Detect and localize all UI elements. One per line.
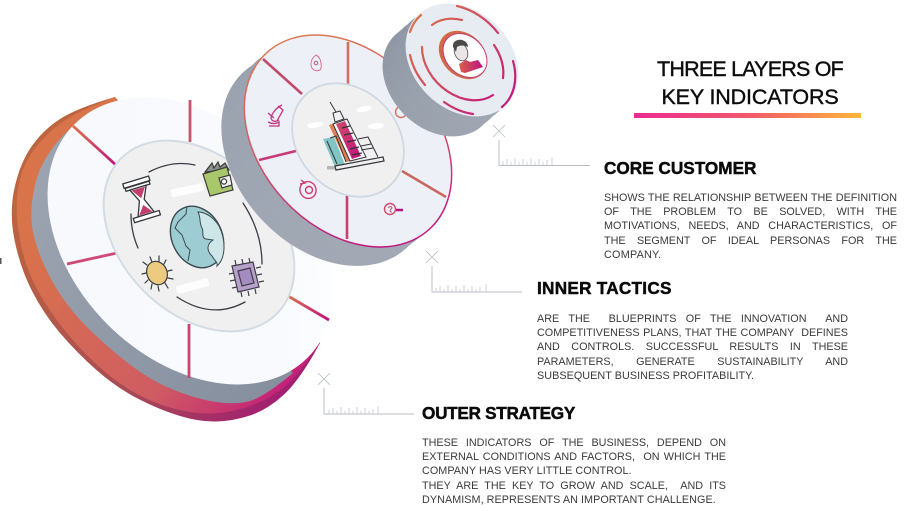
- top disc grey side: [360, 0, 533, 159]
- middle disc face: [203, 0, 493, 288]
- title underline: [634, 113, 861, 118]
- text: core customer description: COMPANY.: [604, 249, 661, 261]
- text: core customer description: OF THE PROBLEM TO BE SOLVED, WITH THE: [604, 206, 897, 218]
- icon: hourglass: [123, 176, 160, 223]
- icon: customer person: [452, 40, 483, 73]
- icon: skyscraper: [323, 102, 384, 170]
- icon: money bag: [297, 179, 319, 201]
- white highlights: [307, 105, 384, 129]
- disc: core customer layer: [360, 0, 541, 159]
- disc: inner tactics layer: [180, 0, 493, 307]
- white highlights: [171, 183, 209, 294]
- icon: microscope: [268, 105, 283, 126]
- text: outer strategy description: COMPANY HAS VERY LITTLE CONTROL.: [422, 465, 632, 477]
- heading: inner tactics: INNER TACTICS: [537, 278, 672, 298]
- text: outer strategy description: THESE INDICATORS OF THE BUSINESS, DEPEND ON: [422, 437, 726, 449]
- title: KEY INDICATORS: [661, 85, 839, 109]
- text: inner tactics description: ARE THE BLUEPRINTS OF THE INNOVATION AND: [537, 313, 848, 325]
- title: THREE LAYERS OF: [657, 57, 843, 81]
- text: inner tactics description: AND CONTROLS. SUCCESSFUL RESULTS IN THESE: [537, 341, 848, 353]
- text: outer strategy description: DYNAMISM, REPRESENTS AN IMPORTANT CHALLENGE.: [422, 494, 716, 506]
- text: inner tactics description: PARAMETERS, GENERATE SUSTAINABILITY AND: [537, 356, 848, 368]
- heading: outer strategy: OUTER STRATEGY: [422, 403, 575, 423]
- text: inner tactics description: COMPETITIVENESS PLANS, THAT THE COMPANY DEFINES: [537, 327, 848, 339]
- customer portrait badge: [429, 21, 497, 89]
- text: core customer description: [604, 192, 897, 261]
- text: outer strategy description: THEY ARE THE KEY TO GROW AND SCALE, AND ITS: [422, 480, 726, 492]
- top disc face: [383, 0, 541, 139]
- text: outer strategy description: [422, 437, 726, 506]
- outer disc spokes: [67, 100, 329, 378]
- icon: sun: [142, 256, 173, 291]
- icon: seed pouch: [311, 55, 321, 71]
- middle disc centre plate: [269, 61, 427, 219]
- leader line: outer strategy: [318, 373, 414, 414]
- icon: microchip: [229, 258, 264, 297]
- outer disc face: [0, 41, 391, 441]
- text: core customer description: MOTIVATIONS, NEEDS, AND CHARACTERISTICS, OF: [604, 220, 897, 232]
- leader line: core customer: [493, 125, 590, 166]
- title: [657, 57, 844, 109]
- leader line: inner tactics: [426, 251, 522, 292]
- heading: core customer: CORE CUSTOMER: [604, 158, 756, 178]
- text: outer strategy description: EXTERNAL CONDITIONS AND FACTORS, ON WHICH THE: [422, 451, 726, 463]
- segmented rings: [410, 6, 515, 114]
- outer disc centre plate: [66, 103, 332, 369]
- cycle arcs: [131, 164, 262, 310]
- middle disc spokes: [259, 42, 446, 239]
- disc edge: outer grey side: [31, 127, 293, 403]
- text: core customer description: THE SEGMENT OF IDEAL PERSONAS FOR THE: [604, 235, 897, 247]
- disc: outer strategy layer: [0, 41, 391, 441]
- text: core customer description: SHOWS THE RELATIONSHIP BETWEEN THE DEFINITION: [604, 192, 897, 204]
- text: inner tactics description: [537, 313, 848, 382]
- middle disc grey side: [180, 3, 482, 307]
- icon: wallet: [203, 162, 233, 196]
- text: inner tactics description: SUBSEQUENT BUSINESS PROFITABILITY.: [537, 370, 754, 382]
- icon: clock: [396, 106, 406, 118]
- icon: globe: [160, 197, 234, 277]
- disc edge: outer orange and magenta rim: [12, 97, 320, 422]
- icon: magnifier: [384, 204, 403, 214]
